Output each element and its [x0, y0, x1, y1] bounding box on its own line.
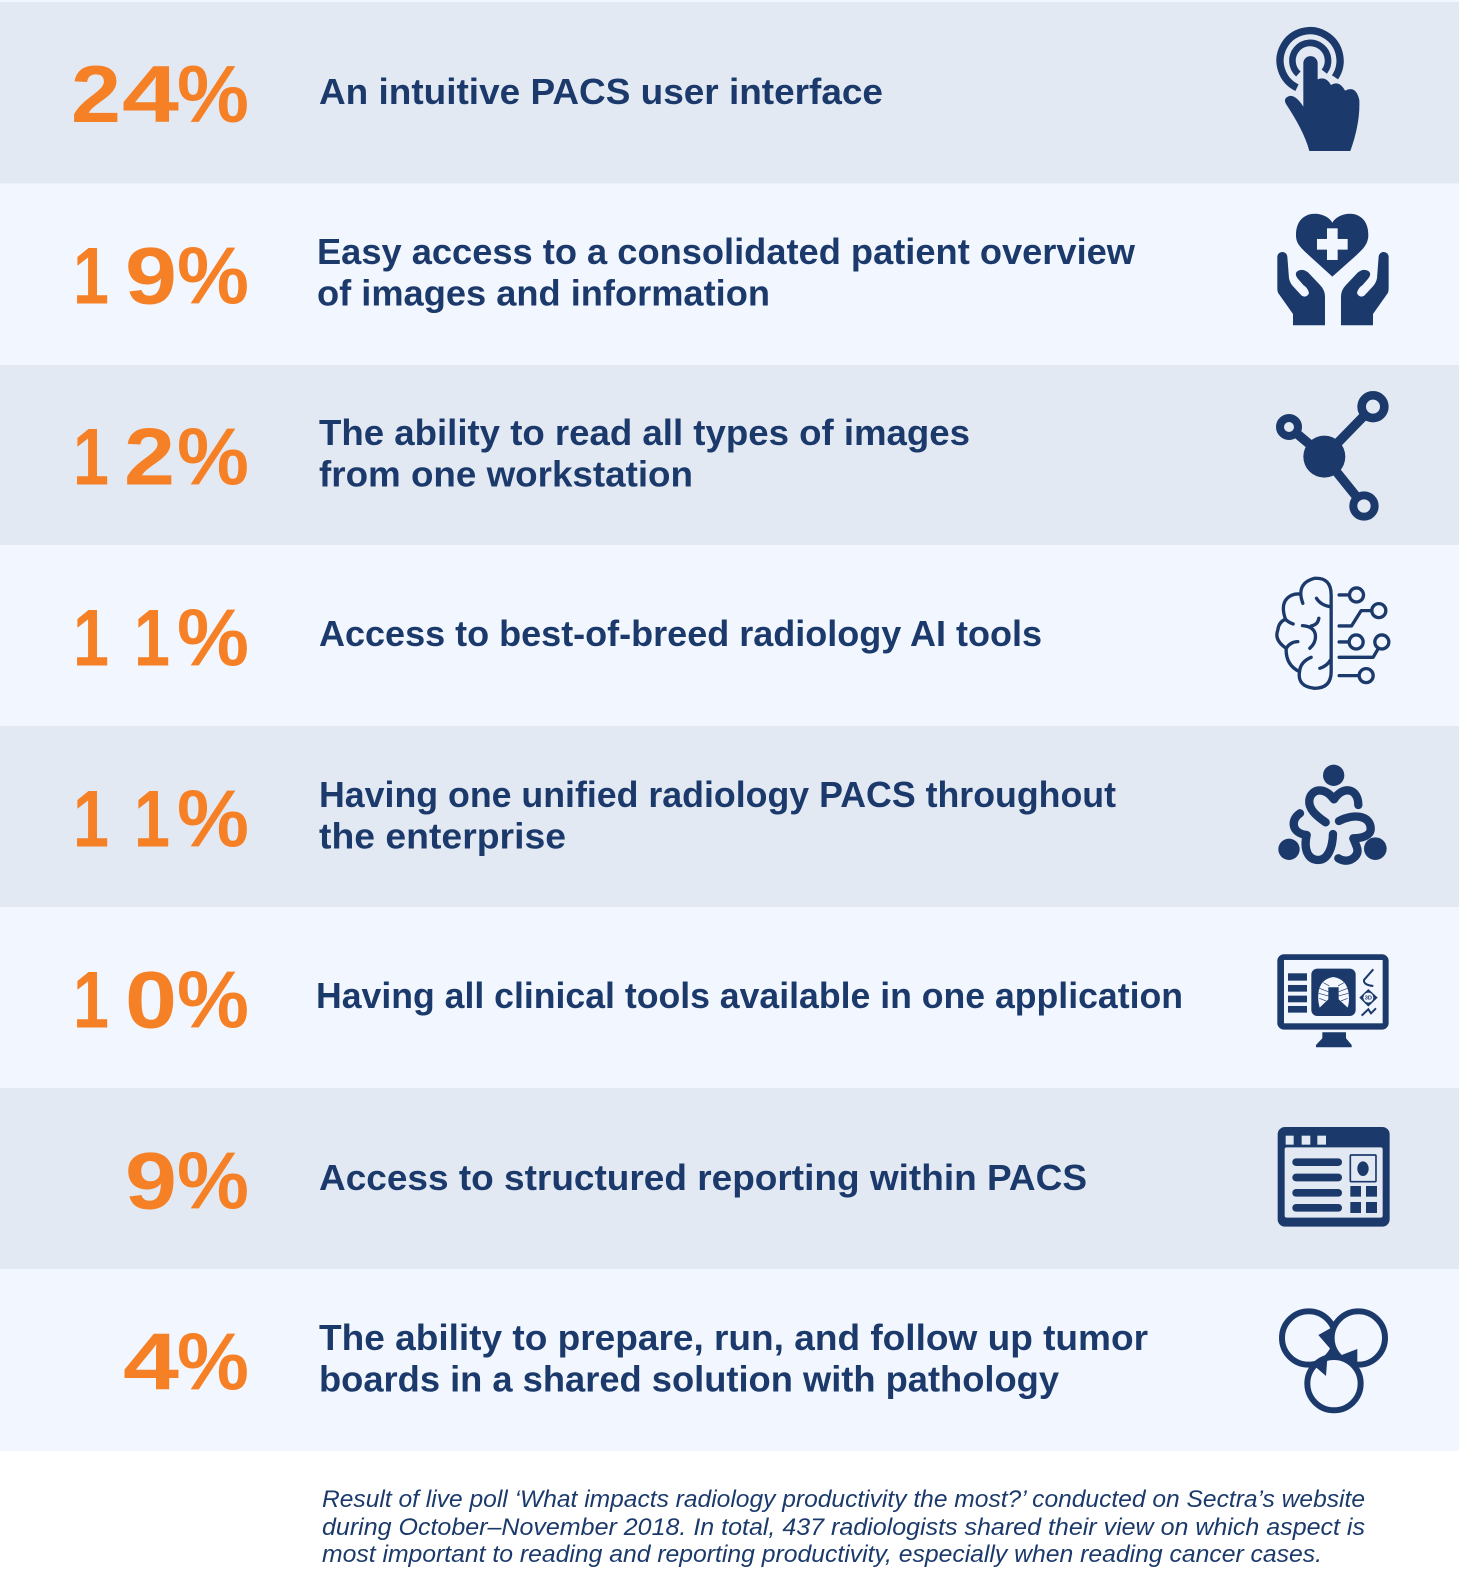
- icon: monitor with chest x-ray: [1277, 954, 1389, 1047]
- percentage 9%: 9: [125, 1136, 177, 1226]
- row 3: 12% read all types of images: [0, 365, 1459, 545]
- label: boards in a shared solution with pathology: [319, 1358, 1059, 1400]
- icon: structured report window: [1278, 1127, 1390, 1227]
- label: The ability to prepare, run, and follow up tumor: [319, 1317, 1148, 1358]
- percentage 10%: 0: [125, 956, 177, 1046]
- footnote: during October–November 2018. In total, 437 radiologists shared their view on which aspect is: [322, 1514, 1365, 1541]
- percentage 4%: %: [177, 1318, 249, 1408]
- row 1: 24% intuitive PACS user interface: [0, 2, 1459, 184]
- label: Having all clinical tools available in one application: [316, 975, 1183, 1016]
- percentage 9%: %: [177, 1136, 249, 1226]
- percentage 10%: %: [177, 956, 249, 1046]
- icon: pointing hand touch: [1280, 31, 1359, 151]
- label: Access to structured reporting within PACS: [319, 1157, 1087, 1198]
- label: An intuitive PACS user interface: [319, 71, 883, 112]
- icon: three interlocking circles: [1282, 1311, 1385, 1410]
- footnote: Result of live poll ‘What impacts radiology productivity the most?’ conducted on Sectra’s website: [322, 1486, 1365, 1513]
- label: Access to best-of-breed radiology AI tools: [319, 613, 1042, 654]
- row 6: 10% clinical tools in one application: [0, 907, 1459, 1088]
- percentage 11%: 1: [73, 774, 109, 864]
- row 5: 11% unified radiology PACS: [0, 726, 1459, 907]
- label: The ability to read all types of images: [319, 412, 970, 453]
- label: Having one unified radiology PACS throughout: [319, 774, 1116, 815]
- percentage 4%: 4: [123, 1318, 179, 1408]
- icon: monitor with chest x-ray: 3D: [1365, 996, 1372, 1002]
- percentage 11%: 1: [134, 594, 170, 684]
- percentage 24%: 4: [122, 50, 179, 140]
- percentage 12%: 1: [73, 412, 109, 502]
- percentage 24%: %: [177, 50, 249, 140]
- percentage 19%: %: [177, 232, 249, 322]
- icon: three linked people: [1278, 765, 1387, 861]
- row 8: 4% tumor boards: [0, 1269, 1459, 1451]
- icon: connected nodes: [1280, 395, 1384, 517]
- percentage 11%: 1: [134, 774, 170, 864]
- label: of images and information: [317, 272, 770, 314]
- percentage 19%: 1: [73, 232, 109, 322]
- percentage 11%: 1: [73, 594, 109, 684]
- percentage 24%: 2: [71, 50, 121, 140]
- label: Easy access to a consolidated patient overview: [317, 231, 1136, 272]
- row 2: 19% consolidated patient overview: [0, 184, 1459, 365]
- percentage 11%: %: [177, 774, 249, 864]
- percentage 12%: %: [177, 412, 249, 502]
- percentage 11%: %: [177, 594, 249, 684]
- percentage 19%: 9: [125, 232, 177, 322]
- row 4: 11% best-of-breed AI tools: [0, 545, 1459, 726]
- icon: hands holding heart with cross: [1277, 214, 1389, 325]
- footnote: most important to reading and reporting productivity, especially when reading cancer cases.: [322, 1541, 1322, 1568]
- icon: brain with circuits: [1277, 578, 1389, 688]
- row 7: 9% structured reporting: [0, 1088, 1459, 1269]
- label: the enterprise: [319, 816, 566, 856]
- label: from one workstation: [319, 454, 693, 494]
- percentage 12%: 2: [124, 412, 175, 502]
- percentage 10%: 1: [73, 956, 109, 1046]
